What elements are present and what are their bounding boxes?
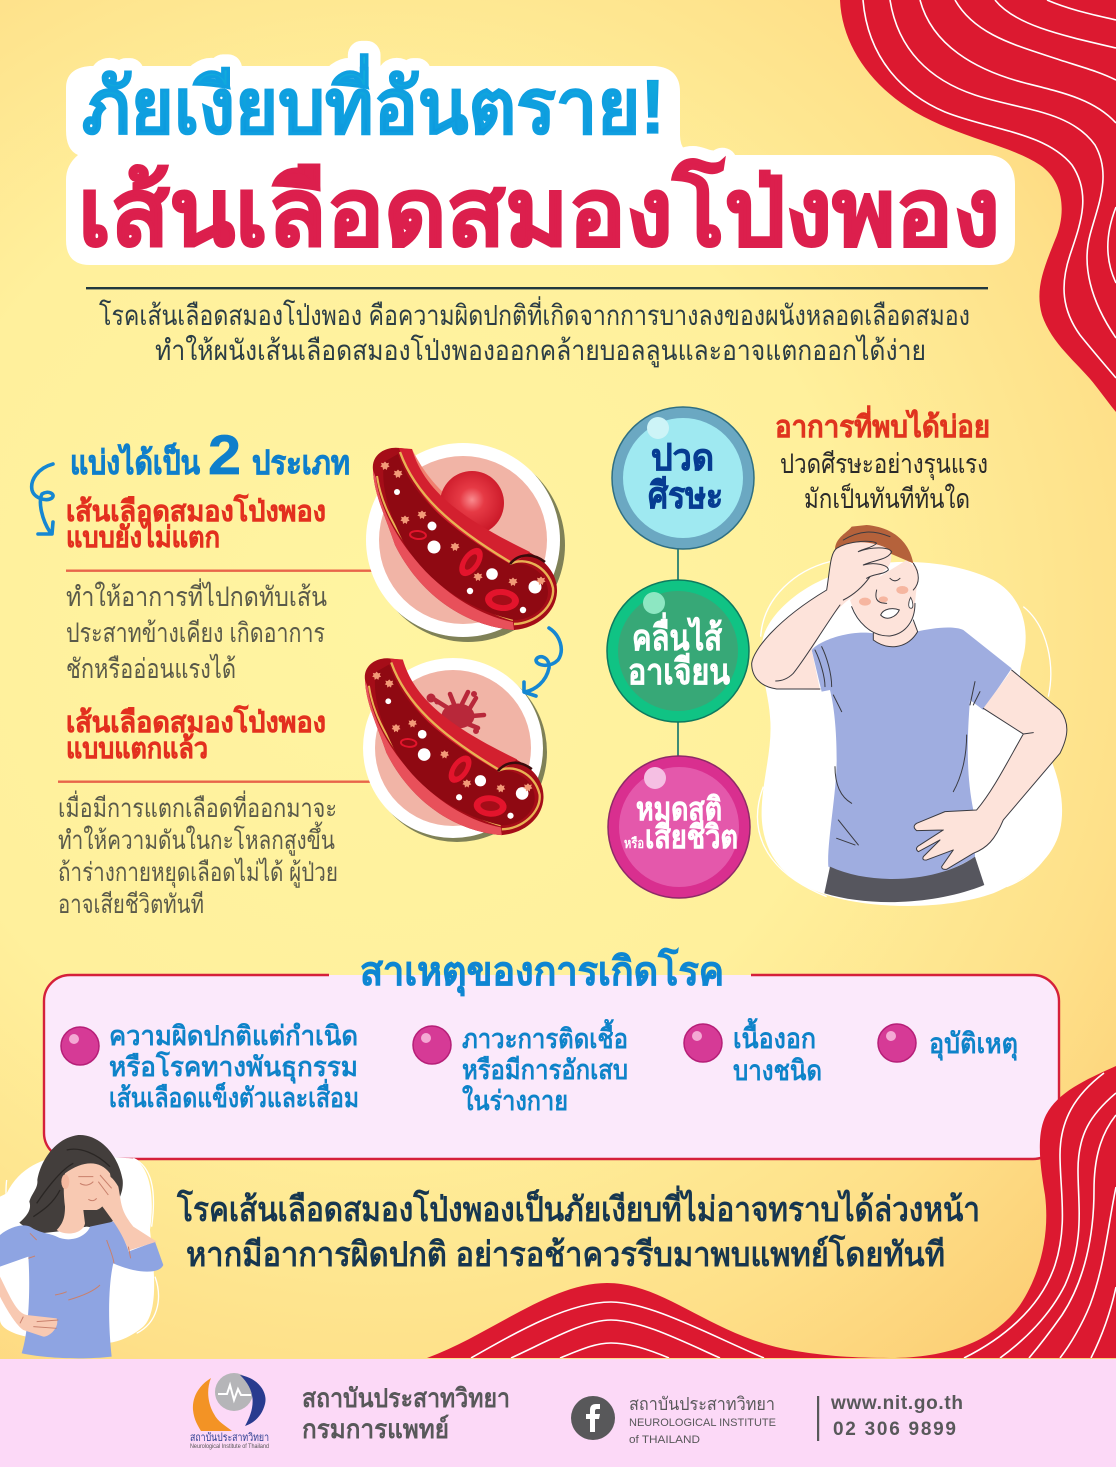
facebook page name [629, 1394, 776, 1446]
cause 4 [878, 1024, 1018, 1062]
logo [190, 1373, 269, 1450]
symptom circle: nausea [607, 580, 749, 722]
cause 2: ภาวะการติดเชื้อ [462, 1018, 628, 1054]
symptom circle: unconscious: หมดสติ [636, 791, 722, 827]
title white backing [66, 66, 1015, 265]
panel: causes of the disease [44, 948, 1059, 1159]
curly arrow between vessels [524, 628, 561, 696]
type 1 text: ชักหรืออ่อนแรงได้ [66, 654, 236, 684]
illustration: unruptured aneurysm [366, 443, 565, 642]
cause 4: อุบัติเหตุ [929, 1028, 1018, 1061]
contact details: 02 306 9899 [833, 1419, 956, 1440]
logo: Neurological Institute of Thailand [190, 1444, 269, 1450]
decorative red wave: bottom right [890, 1066, 1116, 1358]
cause 1: หรือโรคทางพันธุกรรม [109, 1050, 358, 1084]
common symptoms text: มักเป็นทันทีทันใด [804, 481, 970, 514]
type 2 text: เมื่อมีการแตกเลือดที่ออกมาจะ [58, 790, 337, 823]
intro text [99, 296, 970, 368]
symptom circle: unconscious: เสียชีวิต [645, 819, 738, 855]
type 2 text: เส้นเลือดสมองโป่งพอง [66, 704, 326, 739]
title [66, 53, 1015, 265]
institute name [302, 1383, 510, 1444]
facebook page name: of THAILAND [629, 1434, 700, 1446]
cause 3: บางชนิด [733, 1055, 822, 1086]
decorative red wave: bottom hill [427, 1283, 900, 1358]
common symptoms text: อาการที่พบได้บ่อย [775, 405, 990, 444]
cause 3: เนื้องอก [733, 1017, 816, 1054]
contact details: www.nit.go.th [830, 1393, 963, 1414]
cause 1: เส้นเลือดแข็งตัวและเสื่อม [109, 1078, 359, 1113]
cause 1: ความผิดปกติแต่กำเนิด [109, 1021, 358, 1051]
symptom circle: headache: ปวด [651, 437, 714, 478]
common symptoms text: ปวดศีรษะอย่างรุนแรง [780, 449, 988, 481]
symptom circle: headache: ศีรษะ [648, 475, 723, 516]
institute name: กรมการแพทย์ [302, 1414, 449, 1444]
closing message: โรคเส้นเลือดสมองโป่งพองเป็นภัยเงียบที่ไม่อาจทราบได้ล่วงหน้า [176, 1185, 980, 1229]
cause 1 [61, 1021, 359, 1113]
closing message [176, 1185, 980, 1274]
logo: สถาบันประสาทวิทยา [190, 1432, 269, 1444]
footer [0, 1359, 1116, 1467]
icon: facebook [571, 1396, 615, 1440]
illustration: man with headache [752, 525, 1067, 906]
types heading: 2 [208, 423, 241, 486]
illustration: woman with headache [0, 1135, 163, 1358]
type 1 text: เส้นเลือดสมองโป่งพอง [66, 493, 326, 528]
type 1 text: ประสาทข้างเคียง เกิดอาการ [66, 618, 325, 648]
title line 2: เส้นเลือดสมองโป่งพอง [78, 158, 1000, 265]
symptom connector [677, 548, 679, 760]
type 1 text: แบบยังไม่แตก [66, 520, 220, 554]
panel heading: สาเหตุของการเกิดโรค [360, 948, 724, 997]
type 2 text: แบบแตกแล้ว [66, 733, 208, 765]
symptom circle: unconscious: หรือ [624, 835, 644, 851]
type 2 text: ทำให้ความดันในกะโหลกสูงขึ้น [58, 821, 335, 856]
cause 3 [684, 1017, 822, 1086]
common symptoms text [775, 405, 990, 514]
types heading: แบ่งได้เป็น [70, 442, 200, 481]
title line 1: ภัยเงียบที่อันตราย! [82, 53, 665, 150]
facebook page name: สถาบันประสาทวิทยา [629, 1394, 775, 1414]
title line 2: เส้นเลือดสมองโป่งพอง [78, 158, 1000, 265]
types heading [70, 423, 350, 486]
institute name: สถาบันประสาทวิทยา [302, 1383, 510, 1413]
decorative red wave: top right [840, 0, 1116, 412]
symptom circle: nausea: คลื่นไส้ [632, 612, 722, 658]
title line 1: ภัยเงียบที่อันตราย! [82, 53, 665, 150]
cause 2: ในร่างกาย [462, 1085, 568, 1116]
intro text: ทำให้ผนังเส้นเลือดสมองโป่งพองออกคล้ายบอลลูนและอาจแตกออกได้ง่าย [155, 334, 926, 368]
type 2 text: ถ้าร่างกายหยุดเลือดไม่ได้ ผู้ป่วย [58, 857, 338, 888]
symptom circle: unconscious [608, 756, 750, 898]
type 1 text [66, 493, 372, 684]
facebook page name: NEUROLOGICAL INSTITUTE [629, 1417, 776, 1429]
type 2 text: อาจเสียชีวิตทันที [58, 889, 204, 919]
type 2 text [58, 704, 372, 919]
contact details [830, 1393, 963, 1440]
types heading: ประเภท [252, 444, 350, 481]
cause 2 [413, 1018, 628, 1116]
symptom circle: nausea: อาเจียน [628, 651, 730, 692]
symptom circle: headache [612, 407, 754, 549]
curly arrow left [32, 464, 53, 534]
cause 2: หรือมีการอักเสบ [462, 1055, 628, 1085]
closing message: หากมีอาการผิดปกติ อย่ารอช้าควรรีบมาพบแพทย์โดยทันที [186, 1234, 945, 1274]
illustration: ruptured aneurysm [363, 658, 547, 842]
type 1 text: ทำให้อาการที่ไปกดทับเส้น [66, 578, 327, 612]
